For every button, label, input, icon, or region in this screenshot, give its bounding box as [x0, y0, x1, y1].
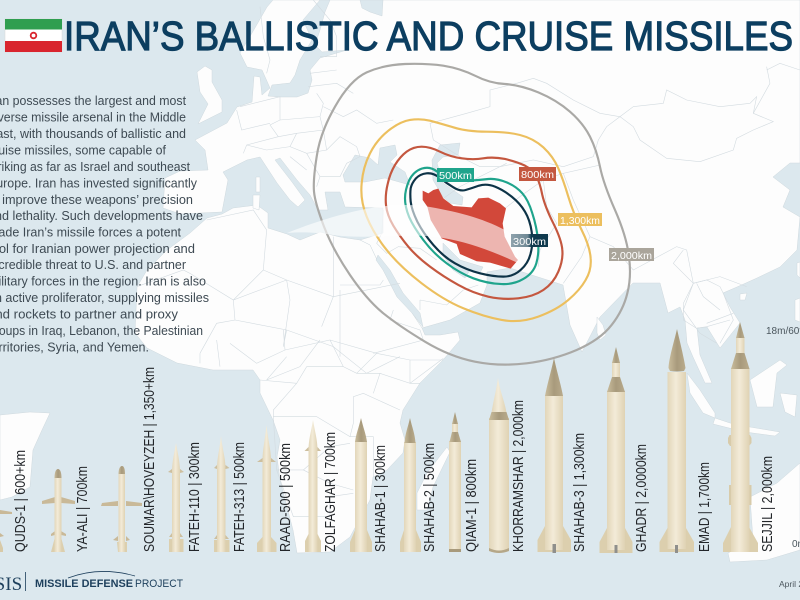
label: 300km: 300km: [513, 236, 546, 248]
missile: Shahab-1: [350, 418, 372, 552]
logo: CSIS Missile Defense Project: [0, 571, 183, 595]
label: 500km: 500km: [439, 170, 472, 182]
missile labels: SOUMAR\HOVEYZEH | 1,350+km: [142, 367, 158, 552]
missile labels: YA-ALI | 700km: [75, 466, 91, 552]
missile: Ghadr: [600, 347, 632, 553]
Iran silhouette: [423, 189, 518, 269]
ring: 1,300km: [361, 119, 591, 321]
label: 1,300km: 1,300km: [560, 215, 600, 227]
ring: 2,000km: [314, 64, 630, 365]
missile labels: SEJJIL | 2,000km: [760, 456, 776, 552]
missile: Fateh-313: [214, 436, 230, 552]
missile labels: FATEH-110 | 300km: [187, 442, 203, 552]
missile labels: SHAHAB-1 | 300km: [373, 445, 389, 552]
missile labels: [13, 367, 776, 552]
logo: CSIS Missile Defense Project: MISSILE DEFENSE: [35, 578, 133, 590]
missile labels: ZOLFAGHAR | 700km: [323, 432, 339, 552]
missile: Zolfaghar: [304, 420, 321, 552]
country borders: [430, 63, 800, 343]
label: 800km: 800km: [521, 169, 554, 181]
missile labels: FATEH-313 | 500km: [232, 442, 248, 552]
ring: 500km: [405, 168, 538, 284]
missile labels: KHORRAMSHAR | 2,000km: [511, 400, 527, 552]
missile: Raad-500: [257, 425, 276, 552]
missile: Sejjil: [723, 322, 758, 552]
missile labels: QIAM-1 | 800km: [464, 459, 480, 552]
ring: 800km: [386, 147, 562, 299]
missile: Shahab-2: [400, 418, 421, 552]
logo: CSIS Missile Defense Project: PROJECT: [135, 578, 183, 590]
missile labels: SHAHAB-2 | 500km: [422, 443, 438, 552]
missile labels: RAAD-500 | 500km: [278, 443, 294, 552]
translucent highlight band: [287, 205, 518, 263]
range rings: [314, 64, 630, 365]
intro text block: [0, 94, 209, 354]
missile: Qiam-1: [449, 412, 461, 552]
icon: Iran flag: [5, 19, 62, 52]
missile labels: EMAD | 1,700km: [697, 462, 713, 552]
missile: Khorramshar: [489, 378, 509, 553]
missile: Fateh-110: [168, 443, 184, 552]
missile: Shahab-3: [538, 358, 571, 553]
missile: Soumar/Hoveyzeh: [101, 466, 142, 552]
ring: 300km: [410, 173, 532, 277]
missile: Quds-1: [0, 510, 12, 552]
missile labels: SHAHAB-3 | 1,300km: [572, 433, 588, 552]
missile labels: QUDS-1 | 600+km: [13, 450, 29, 552]
label: 2,000km: 2,000km: [611, 250, 652, 262]
missile: Ya-Ali: [42, 469, 75, 552]
missile: Emad: [660, 329, 694, 553]
missile labels: GHADR | 2,0000km: [634, 444, 650, 552]
